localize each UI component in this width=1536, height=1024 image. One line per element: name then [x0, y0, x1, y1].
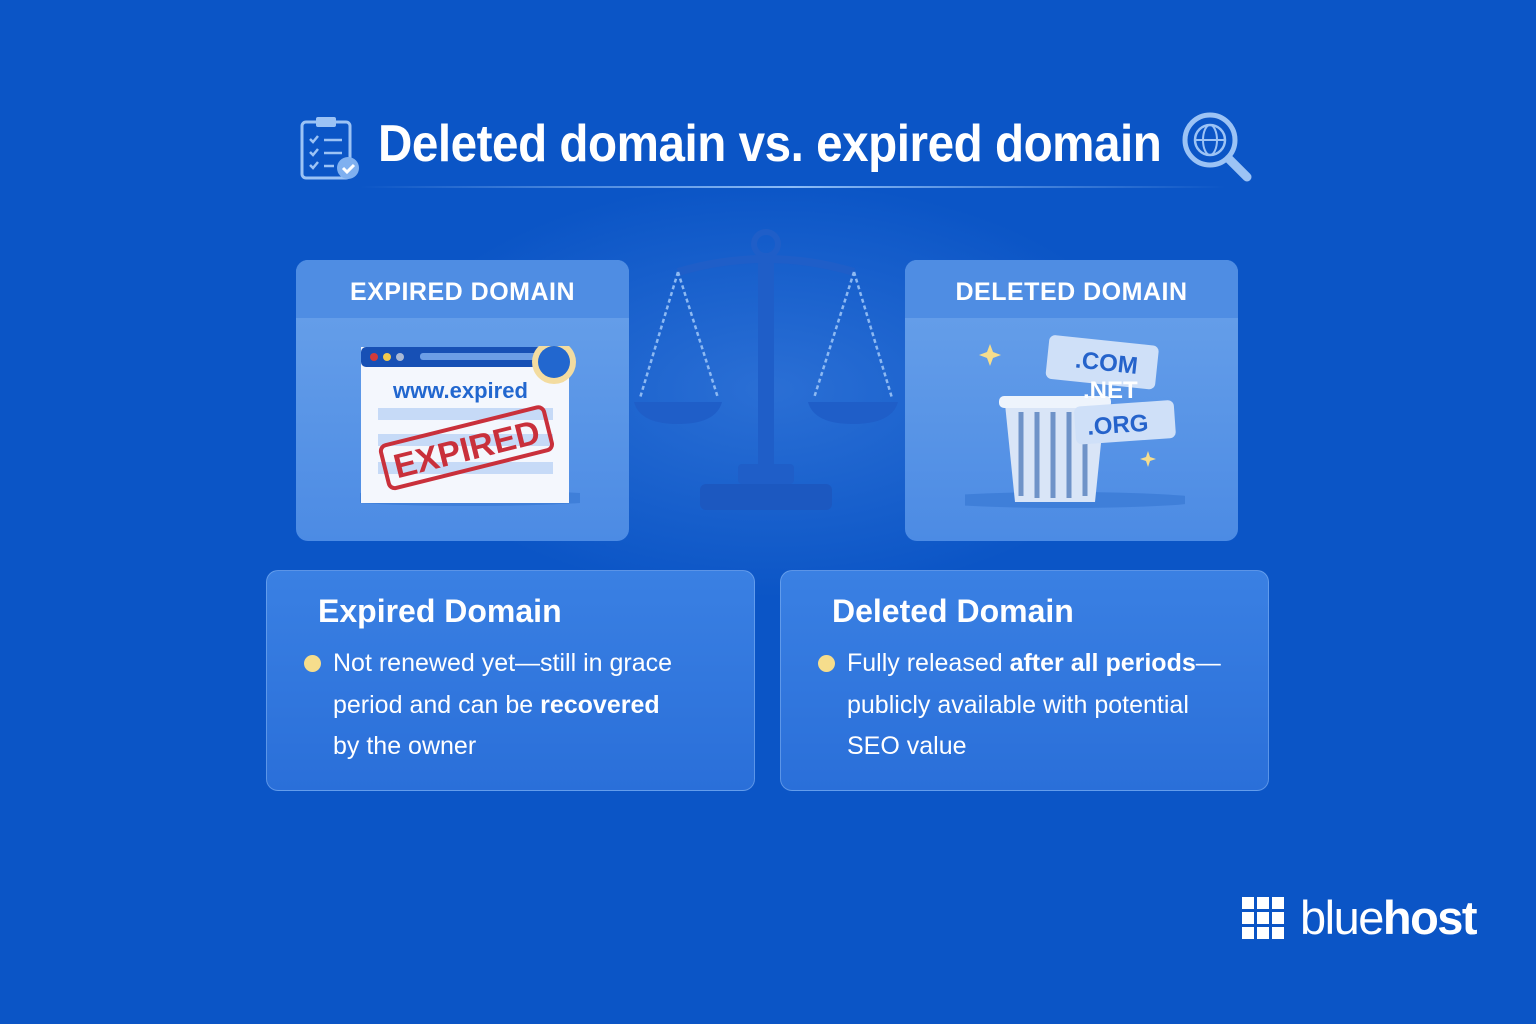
- panel: deleted domain card: [905, 260, 1238, 541]
- icon: expired browser window: [360, 346, 580, 506]
- panel: expired domain card: EXPIRED DOMAIN: [350, 278, 575, 306]
- icon: trash with domain tags: .COM: [1074, 346, 1139, 380]
- panel: deleted domain card: DELETED DOMAIN: [956, 278, 1188, 306]
- icon: trash with domain tags: .NET: [1083, 377, 1138, 404]
- text: deleted description: Fully released after all periods—publicly available with potential SEO value: [847, 649, 1221, 760]
- icon: trash with domain tags: [965, 335, 1185, 508]
- logo: bluehost: bluehost: [1300, 891, 1476, 944]
- heading: deleted domain: Deleted Domain: [832, 593, 1074, 629]
- panel: expired domain text box: [266, 570, 755, 791]
- icon: clipboard: [300, 117, 359, 180]
- icon: balance scale: [635, 229, 898, 510]
- icon: expired browser window: EXPIRED: [390, 413, 544, 486]
- title: Deleted domain vs. expired domain: [378, 115, 1161, 173]
- panel: deleted domain text box: [780, 570, 1269, 791]
- icon: expired browser window: www.expired: [392, 378, 528, 403]
- panel: expired domain card: [296, 260, 629, 541]
- text: expired description: Not renewed yet—still in grace period and can be recovered by the owner: [333, 649, 672, 760]
- icon: magnifier globe: [1182, 112, 1252, 182]
- icon: trash with domain tags: .ORG: [1086, 410, 1149, 441]
- heading: expired domain: Expired Domain: [318, 593, 562, 629]
